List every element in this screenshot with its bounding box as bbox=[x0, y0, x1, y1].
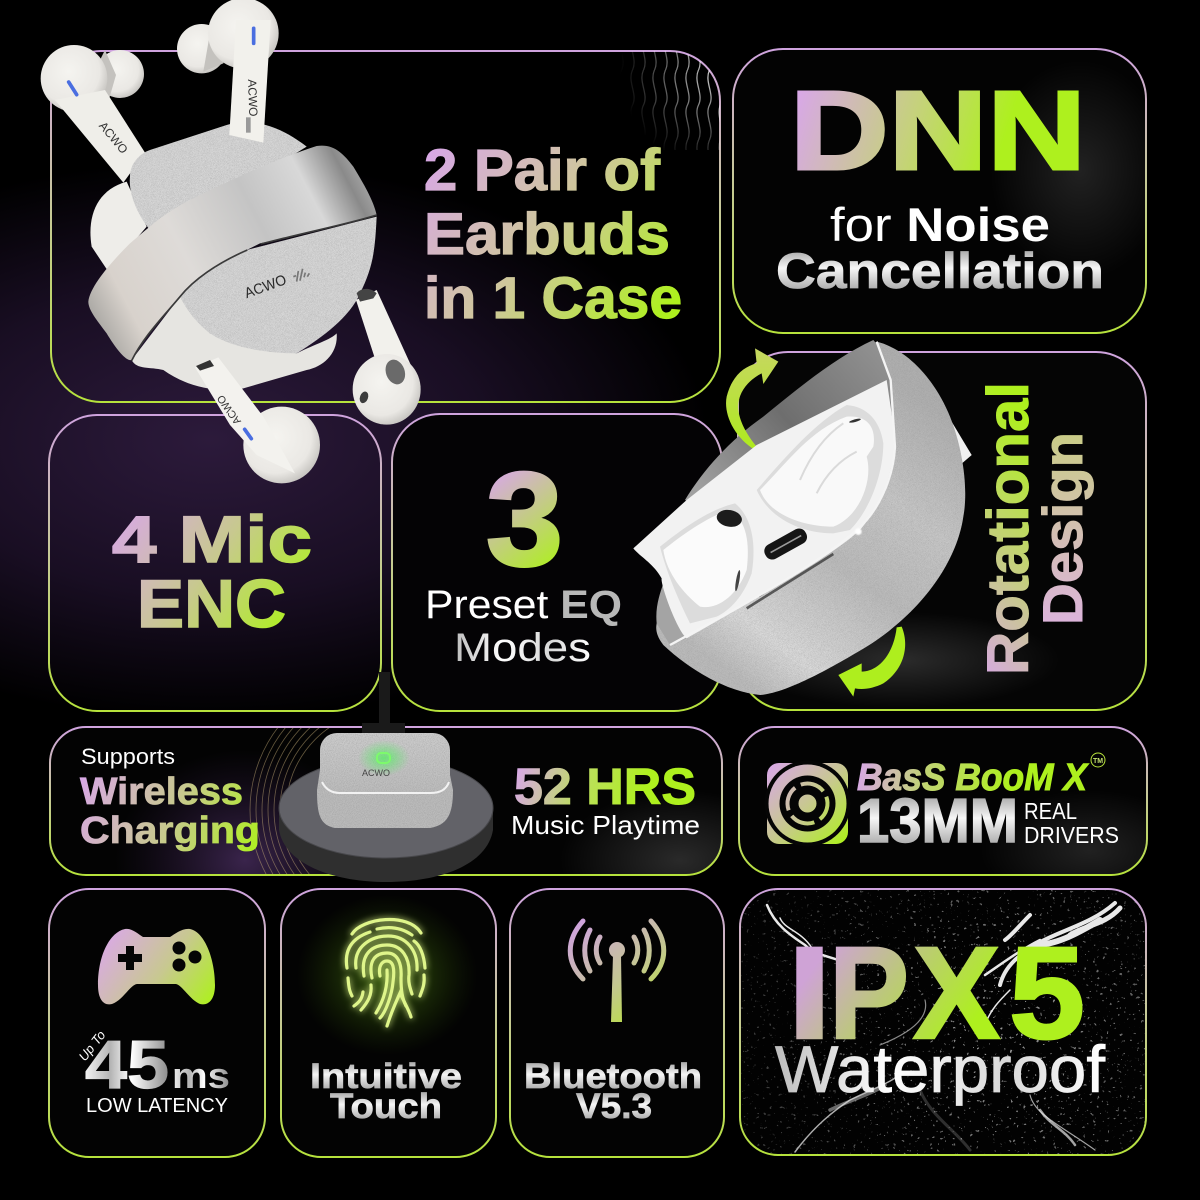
icon: antenna bbox=[570, 921, 664, 1022]
heading: 2 Pair of Earbuds in 1 Case: 2 Pair of bbox=[424, 138, 661, 203]
water splash bbox=[740, 889, 1146, 1155]
panel: wireless charging and playtime bbox=[49, 726, 723, 876]
panel: low latency bbox=[49, 889, 265, 1157]
tray recesses bbox=[660, 405, 883, 623]
lid interior bbox=[685, 340, 972, 517]
panel: bluetooth bbox=[510, 889, 724, 1157]
metal band bbox=[88, 146, 377, 360]
text: IPX5: I bbox=[787, 919, 832, 1066]
outer shell bbox=[656, 342, 965, 695]
case white body rear bbox=[90, 182, 147, 272]
logo on case bbox=[243, 269, 309, 302]
text: REAL DRIVERS: REAL bbox=[1024, 798, 1077, 824]
earbud bottom: ACWO bbox=[215, 392, 244, 426]
text: LOW LATENCY: LOW LATENCY bbox=[86, 1095, 228, 1117]
panel: rotational design bbox=[738, 352, 1146, 710]
heading: 2 Pair of Earbuds in 1 Case: in 1 Case bbox=[424, 266, 682, 331]
panel: intuitive touch bbox=[281, 889, 496, 1157]
text: 52 HRS: 52 HRS bbox=[514, 758, 696, 815]
silver rim bbox=[670, 342, 895, 645]
heading: 2 Pair of Earbuds in 1 Case bbox=[424, 138, 682, 331]
icon: fingerprint bbox=[346, 920, 425, 1026]
icon: speaker driver bbox=[764, 760, 850, 846]
text: Supports: Supports bbox=[81, 744, 175, 769]
text: Intuitive Touch: Intuitive bbox=[310, 1057, 462, 1096]
heading: DNN: DNN bbox=[790, 68, 1086, 193]
interior white tray bbox=[633, 380, 895, 638]
charging cable bbox=[362, 672, 405, 736]
charger dock bbox=[279, 758, 493, 882]
text: REAL DRIVERS: DRIVERS bbox=[1024, 822, 1119, 848]
text: Music Playtime: Music Playtime bbox=[511, 810, 700, 840]
text: Bluetooth V5.3: Bluetooth bbox=[524, 1057, 702, 1096]
text: REAL DRIVERS bbox=[1024, 798, 1119, 848]
interior gray wall bbox=[656, 583, 687, 645]
arrow: rotate down bbox=[838, 627, 905, 697]
text: Up To: Up To bbox=[76, 1028, 108, 1064]
text: Bluetooth V5.3: V5.3 bbox=[576, 1087, 652, 1126]
text: Modes: Modes bbox=[454, 626, 591, 670]
number: 3: 3 bbox=[486, 446, 563, 594]
panel: two pairs of earbuds bbox=[51, 50, 722, 402]
USB-C port bbox=[762, 526, 810, 562]
text: IPX5: X bbox=[913, 919, 1000, 1066]
logo on case: ACWO bbox=[243, 272, 289, 302]
panel: DNN noise cancellation bbox=[733, 49, 1170, 333]
text: IPX5: P bbox=[829, 919, 909, 1066]
case fabric rear bbox=[130, 122, 307, 230]
earbud top-left: ACWO bbox=[96, 119, 131, 156]
charging case: ACWO bbox=[362, 768, 390, 778]
text: 13MM: 13MM bbox=[857, 787, 1018, 856]
text: Wireless Charging bbox=[80, 771, 260, 852]
illustration: open case with two pairs of earbuds bbox=[41, 0, 421, 483]
illustration: rotating case with arrows bbox=[633, 340, 972, 697]
case body lower bbox=[132, 297, 337, 390]
text: IPX5 bbox=[787, 919, 1085, 1066]
earbud top-right bbox=[177, 0, 279, 143]
heading: 2 Pair of Earbuds in 1 Case: Earbuds bbox=[424, 202, 670, 267]
text: Waterproof: Waterproof bbox=[775, 1032, 1106, 1106]
illustration: case on wireless charger bbox=[279, 672, 493, 882]
text: Intuitive Touch: Touch bbox=[330, 1087, 442, 1126]
text: IPX5: 5 bbox=[1009, 919, 1085, 1066]
text: ENC: ENC bbox=[137, 566, 286, 642]
earbud top-left bbox=[41, 45, 145, 183]
text: 4 Mic: 4 Mic bbox=[112, 502, 312, 576]
text: Wireless Charging: Wireless bbox=[80, 771, 243, 813]
charging case bbox=[317, 733, 453, 828]
text: Intuitive Touch bbox=[310, 1057, 462, 1126]
text: Wireless Charging: Charging bbox=[80, 810, 260, 852]
text: 45: 45 bbox=[85, 1027, 169, 1103]
text: Design: Design bbox=[1031, 432, 1094, 625]
text: Cancellation: Cancellation bbox=[776, 243, 1104, 299]
text: ms: ms bbox=[172, 1055, 230, 1096]
panel: 4 Mic ENC bbox=[49, 415, 381, 711]
icon: trademark bbox=[1091, 753, 1105, 767]
text: BasS BooM X: BasS BooM X bbox=[857, 757, 1089, 799]
text: Bluetooth V5.3 bbox=[524, 1057, 702, 1126]
panel: IPX5 waterproof bbox=[740, 889, 1146, 1155]
earbud right bbox=[353, 289, 421, 425]
text: for Noise: for Noise bbox=[830, 198, 1050, 251]
decorative wave pattern bbox=[630, 51, 720, 150]
earbud top-right: ACWO bbox=[245, 79, 260, 117]
earbud bottom bbox=[195, 357, 320, 483]
earbud left in tray bbox=[663, 508, 748, 607]
text: Rotational: Rotational bbox=[976, 382, 1041, 675]
case fabric front bbox=[180, 217, 377, 353]
panel: 3 preset EQ modes bbox=[392, 414, 722, 711]
icon: game controller bbox=[98, 929, 215, 1004]
arrow: rotate up bbox=[726, 348, 778, 450]
icon: trademark: TM bbox=[1093, 758, 1103, 765]
earbud right in tray bbox=[760, 417, 874, 527]
panel: Bass Boom X drivers bbox=[738, 726, 1148, 876]
charging ripple arcs bbox=[250, 728, 330, 874]
text: Preset EQ: Preset EQ bbox=[425, 583, 622, 627]
